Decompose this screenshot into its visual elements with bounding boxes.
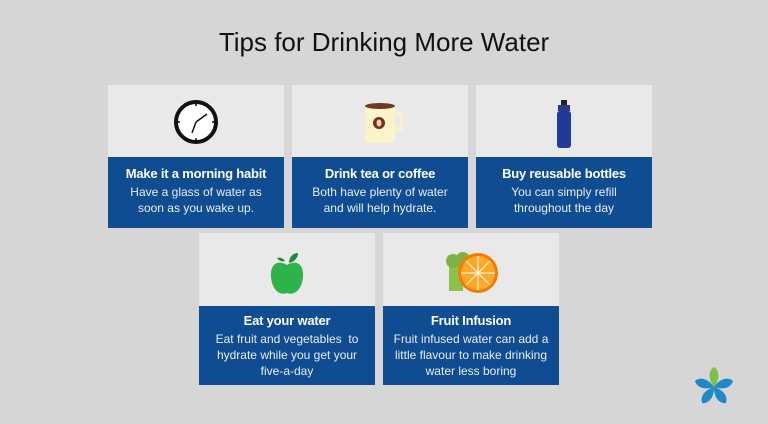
text block: Eat your water — [244, 313, 330, 328]
text block: little flavour to make drinking — [395, 348, 547, 362]
text block: Fruit infused water can add a — [394, 332, 548, 346]
panel: morning habit — [108, 85, 284, 228]
text block: Eat fruit and vegetables to — [216, 332, 358, 346]
panel: reusable bottles — [476, 85, 652, 228]
text block: You can simply refill — [511, 185, 617, 199]
text block: throughout the day — [514, 201, 614, 215]
text block — [108, 157, 284, 228]
text block: water less boring — [426, 364, 516, 378]
panel: fruit infusion — [383, 233, 559, 385]
icon: bottle — [557, 100, 571, 148]
text block: five-a-day — [261, 364, 313, 378]
text block — [292, 157, 468, 228]
text block: Fruit Infusion — [431, 313, 511, 328]
text block — [383, 306, 559, 385]
text block: Buy reusable bottles — [502, 166, 626, 181]
text block: hydrate while you get your — [217, 348, 357, 362]
icon: mug — [365, 103, 403, 143]
icon: apple — [270, 253, 304, 294]
icon: orange and broccoli — [446, 252, 498, 293]
panel: eat your water — [199, 233, 375, 385]
text block: and will help hydrate. — [324, 201, 436, 215]
icon: logo — [695, 367, 733, 404]
text block — [199, 306, 375, 385]
title: Tips for Drinking More Water — [219, 27, 549, 57]
icon: clock — [174, 100, 218, 144]
text block: Have a glass of water as — [130, 185, 262, 199]
text block: Make it a morning habit — [126, 166, 266, 181]
text block — [476, 157, 652, 228]
panel: tea or coffee — [292, 85, 468, 228]
text block: Both have plenty of water — [312, 185, 448, 199]
text block: Drink tea or coffee — [325, 166, 435, 181]
text block: soon as you wake up. — [138, 201, 254, 215]
